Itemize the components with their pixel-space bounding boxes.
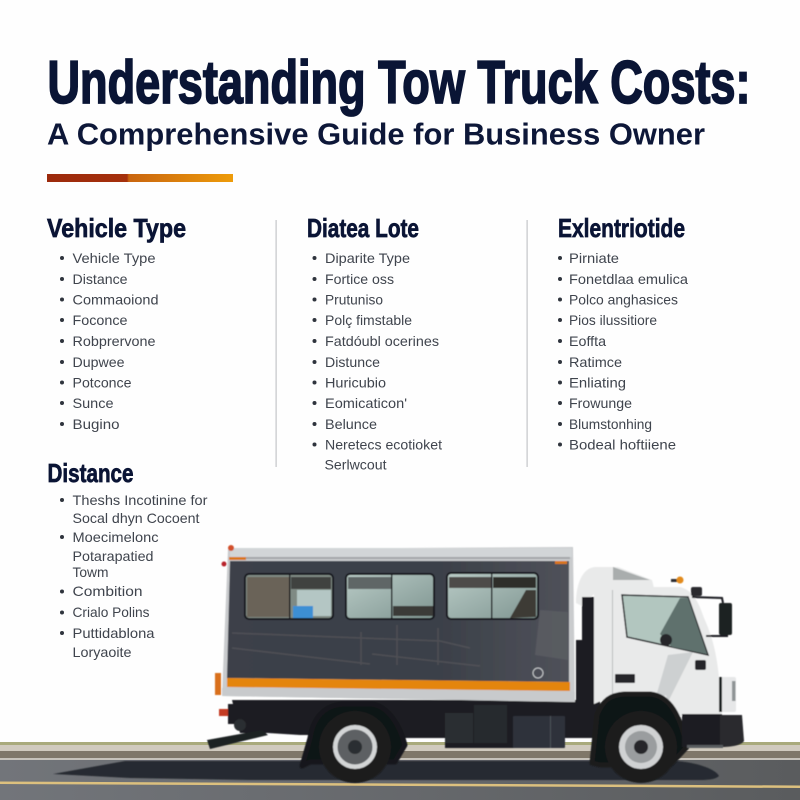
list: diatea lote items: Serlwcout — [324, 456, 387, 472]
sidewalk — [0, 745, 800, 751]
list: vehicle type items: Robprervone — [72, 333, 156, 349]
column 1: vehicle type — [47, 213, 186, 432]
list: diatea lote items: Diparite Type — [325, 250, 410, 266]
dark panel — [227, 561, 569, 682]
heading: vehicle type: Vehicle Type — [47, 213, 186, 243]
list: exlentriotide items: Polco anghasices — [569, 292, 678, 308]
grass strip — [0, 742, 800, 745]
list: vehicle type items: Distance — [72, 271, 128, 287]
rear box body — [215, 545, 575, 702]
list: vehicle type items — [60, 250, 158, 432]
list: exlentriotide items: Ratimce — [569, 354, 622, 370]
road shadow — [53, 761, 719, 780]
list: vehicle type items: Vehicle Type — [72, 250, 156, 266]
window interior — [660, 598, 707, 654]
list: distance items: Loryaoite — [72, 644, 132, 660]
door seam — [612, 590, 613, 697]
window 3 — [447, 573, 538, 619]
cab body — [594, 587, 722, 716]
divider left — [276, 220, 277, 467]
corner marker lights — [215, 545, 567, 695]
panel porthole — [533, 668, 543, 678]
list: exlentriotide items: Blumstonhing — [569, 416, 652, 432]
list: exlentriotide items: Pios ilussitiore — [569, 312, 657, 328]
list: vehicle type items: Bugino — [72, 416, 120, 432]
cab rear fairing — [576, 567, 655, 606]
list: distance items: Socal dhyn Cocoent — [72, 510, 200, 526]
front wheel — [605, 711, 677, 783]
road scene — [0, 742, 800, 800]
list: vehicle type items: Potconce — [72, 374, 132, 390]
rear wheel — [319, 711, 391, 783]
silver frame — [222, 547, 575, 702]
cab — [576, 587, 744, 765]
yellow road line — [0, 782, 800, 788]
list: distance items: Theshs Incotinine for — [72, 492, 208, 508]
curb — [0, 751, 800, 758]
accent bar — [47, 174, 233, 182]
list: vehicle type items: Foconce — [72, 312, 128, 328]
column 2: diatea lote — [307, 213, 442, 472]
reflection: right glare — [535, 610, 568, 660]
column 3: exlentriotide — [558, 213, 688, 452]
section: distance — [48, 458, 208, 660]
list: diatea lote items: Fortice oss — [325, 271, 394, 287]
front wheel arch — [592, 694, 687, 765]
list: exlentriotide items: Pirniate — [569, 250, 619, 266]
list: diatea lote items: Belunce — [325, 416, 377, 432]
list: diatea lote items: Huricubio — [325, 374, 386, 390]
panel reflections — [232, 625, 480, 666]
headlight — [719, 677, 736, 712]
door shadow band — [655, 652, 693, 702]
list: diatea lote items: Distunce — [325, 354, 380, 370]
road surface — [0, 760, 800, 800]
side mirror — [691, 587, 732, 636]
roof beacon — [671, 576, 684, 584]
list: distance items: Puttidablona — [72, 625, 155, 641]
storage tanks — [445, 705, 565, 748]
door handle — [615, 674, 635, 683]
chassis — [232, 700, 600, 760]
list: exlentriotide items: Fonetdlaa emulica — [569, 271, 688, 287]
list: distance items: Potarapatied — [72, 548, 154, 564]
list: diatea lote items: Polç fimstable — [325, 312, 412, 328]
cab back frame — [576, 597, 595, 710]
front bumper — [720, 715, 744, 747]
heading: distance: Distance — [48, 458, 134, 488]
list: distance items: Combition — [72, 583, 142, 599]
list: exlentriotide items: Eoffta — [569, 333, 606, 349]
lower silver band — [222, 688, 575, 702]
list: vehicle type items: Commaoiond — [72, 292, 158, 308]
list: exlentriotide items: Frowunge — [569, 395, 632, 411]
list: vehicle type items: Dupwee — [72, 354, 125, 370]
list: diatea lote items: Fatdóubl ocerines — [325, 333, 439, 349]
list: distance items — [60, 492, 208, 660]
heading: exlentriotide: Exlentriotide — [558, 213, 685, 243]
heading: diatea lote: Diatea Lote — [307, 213, 419, 243]
window 1 — [245, 574, 333, 619]
divider right — [526, 220, 528, 467]
list: exlentriotide items — [558, 250, 688, 452]
rear tow bar — [207, 704, 268, 749]
list: exlentriotide items: Enliating — [569, 374, 626, 390]
list: distance items: Crialo Polins — [72, 604, 150, 620]
front lower panel — [682, 714, 722, 747]
rear wheel arch — [302, 704, 405, 766]
window 2 — [346, 574, 434, 619]
step — [687, 745, 723, 748]
list: diatea lote items: Eomicaticon' — [325, 395, 407, 411]
subtitle: A Comprehensive Guide for Business Owner — [47, 116, 705, 152]
list: diatea lote items: Prutuniso — [325, 292, 383, 308]
list: vehicle type items: Sunce — [72, 395, 114, 411]
truck — [207, 545, 744, 783]
window — [622, 595, 708, 655]
list: diatea lote items — [312, 250, 442, 472]
list: distance items: Towm — [72, 564, 108, 580]
list: distance items: Moecimelonc — [72, 529, 158, 545]
orange stripe — [227, 678, 570, 691]
list: diatea lote items: Neretecs ecotioket — [325, 436, 442, 452]
list: exlentriotide items: Bodeal hoftiiene — [569, 436, 676, 452]
mirror handle — [695, 660, 706, 670]
